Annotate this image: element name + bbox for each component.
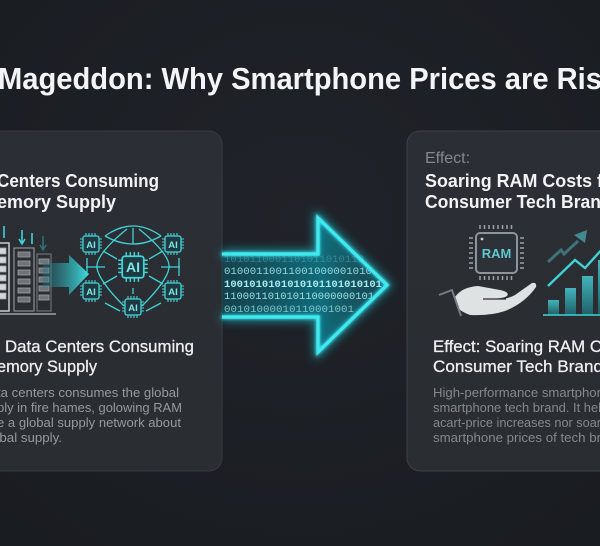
arrow outline bbox=[222, 218, 387, 352]
illustration: servers feeding AI network bbox=[0, 226, 184, 318]
body text: acart-price increases nor soar bbox=[433, 415, 600, 430]
trend line bbox=[548, 247, 600, 286]
down arrows bbox=[4, 226, 46, 250]
glowing arrow bbox=[222, 218, 387, 352]
AI chips: AI bbox=[126, 259, 140, 275]
chart baseline bbox=[543, 314, 600, 316]
panel heading: Centers Consuming bbox=[0, 170, 159, 191]
binary stream: 1001010101010101101010101 bbox=[224, 279, 382, 291]
body text: ta centers consumes the global bbox=[0, 385, 179, 400]
AI chips bbox=[80, 233, 184, 318]
teal arrow bbox=[43, 255, 89, 295]
panel heading: emory Supply bbox=[0, 191, 117, 212]
illustration: RAM chip on hand bbox=[439, 225, 536, 316]
body text: e a global supply network about bbox=[0, 415, 181, 430]
body text: High-performance smartphor bbox=[433, 385, 600, 400]
panel background bbox=[407, 131, 600, 471]
AI chips: AI bbox=[168, 240, 178, 251]
body text: smartphone tech brand. It hel bbox=[433, 400, 600, 415]
panel background bbox=[0, 131, 222, 471]
panel: cause bbox=[0, 131, 222, 471]
panel: effect bbox=[407, 131, 600, 471]
AI chips: AI bbox=[86, 240, 96, 251]
dim up arrow bbox=[548, 241, 578, 262]
AI chips: AI bbox=[86, 287, 96, 298]
binary stream: 1010110001101011010110 bbox=[224, 254, 364, 266]
illustration: rising chart bbox=[543, 230, 600, 315]
binary stream: 00101000010110001001 bbox=[224, 304, 354, 316]
globe network bbox=[86, 226, 180, 311]
hand bbox=[455, 283, 536, 315]
lower heading: emory Supply bbox=[0, 357, 97, 376]
lower heading: Data Centers Consuming bbox=[5, 337, 194, 356]
lower heading: Effect: Soaring RAM C bbox=[433, 337, 600, 356]
AI chips: AI bbox=[168, 287, 178, 298]
body text: ply in fire hames, golowing RAM bbox=[0, 400, 182, 415]
binary stream: 110001101010110000000101 bbox=[224, 291, 374, 303]
binary stream bbox=[224, 254, 382, 316]
binary stream: 01000110011001000001010 bbox=[224, 266, 372, 278]
effect label: Effect: bbox=[425, 150, 470, 167]
body text: smartphone prices of tech br bbox=[433, 430, 600, 445]
RAM chip: RAM bbox=[482, 246, 511, 261]
bars bbox=[548, 300, 559, 315]
AI chips: AI bbox=[128, 303, 138, 314]
arrow fill bbox=[222, 218, 387, 352]
arrow glow bbox=[222, 218, 387, 352]
hand cuff bbox=[439, 290, 461, 316]
lower heading: Consumer Tech Brand bbox=[433, 357, 600, 376]
server racks bbox=[0, 243, 56, 314]
